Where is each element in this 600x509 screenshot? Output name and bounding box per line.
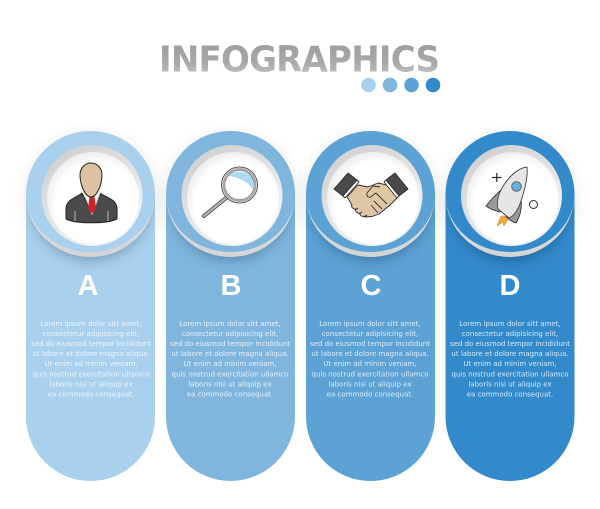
text block C: laboris nisi ut aliquip ex xyxy=(328,380,412,388)
panel: A xyxy=(25,131,157,481)
panel: C xyxy=(305,131,437,481)
icon: rocket xyxy=(486,167,538,226)
text block A xyxy=(31,320,151,398)
icon: handshake xyxy=(334,173,408,217)
text block B: consectetur adipisicing elit, xyxy=(182,330,278,338)
text block C: sed do eiusmod tempor incididunt xyxy=(310,340,430,348)
letter C: C xyxy=(361,270,382,302)
title dots xyxy=(361,78,440,92)
text block A: ut labore et dolore magna aliqua. xyxy=(32,350,150,358)
text block C: ea commodo consequat. xyxy=(327,390,413,398)
badge C xyxy=(306,131,435,257)
text block C: consectetur adipisicing elit, xyxy=(322,330,418,338)
text block A: consectetur adipisicing elit, xyxy=(43,330,139,338)
title: INFOGRAPHICS xyxy=(159,40,440,81)
text block C: Ut enim ad minim veniam, xyxy=(323,360,417,368)
column A xyxy=(26,193,155,481)
panel: B xyxy=(165,131,297,481)
text block B: sed do eiusmod tempor incididunt xyxy=(170,340,290,348)
text block A: sed do eiusmod tempor incididunt xyxy=(31,340,151,348)
text block D: ea commodo consequat. xyxy=(467,390,553,398)
text block D: consectetur adipisicing elit, xyxy=(462,330,558,338)
text block D: quis nostrud exercitation ullamco xyxy=(452,370,568,378)
icon: businessman xyxy=(66,163,117,223)
badge B xyxy=(166,131,295,257)
text block D: Lorem ipsum dolor sitt amet, xyxy=(459,320,561,328)
text block C xyxy=(310,320,430,398)
badge D xyxy=(446,131,574,257)
text block B: ut labore et dolore magna aliqua. xyxy=(171,350,289,358)
text block D: sed do eiusmod tempor incididunt xyxy=(450,340,570,348)
letter D: D xyxy=(500,270,520,302)
text block C: quis nostrud exercitation ullamco xyxy=(312,370,428,378)
text block C: ut labore et dolore magna aliqua. xyxy=(311,350,429,358)
panel: D xyxy=(444,131,576,481)
badge A xyxy=(26,131,155,257)
text block A: Lorem ipsum dolor sitt amet, xyxy=(40,320,142,328)
text block B: Ut enim ad minim veniam, xyxy=(183,360,277,368)
text block D: ut labore et dolore magna aliqua. xyxy=(451,350,569,358)
column D xyxy=(446,193,574,481)
text block D xyxy=(450,320,570,398)
icon: magnifying glass xyxy=(204,167,258,216)
column C xyxy=(306,193,435,481)
text block C: Lorem ipsum dolor sitt amet, xyxy=(319,320,421,328)
text block A: Ut enim ad minim veniam, xyxy=(44,360,138,368)
column B xyxy=(166,193,295,481)
text block B: laboris nisi ut aliquip ex xyxy=(188,380,272,388)
text block B: quis nostrud exercitation ullamco xyxy=(172,370,288,378)
text block A: laboris nisi ut aliquip ex xyxy=(49,380,133,388)
text block B: ea commodo consequat. xyxy=(187,390,273,398)
text block D: laboris nisi ut aliquip ex xyxy=(468,380,552,388)
text block A: ea commodo consequat. xyxy=(48,390,134,398)
letter B: B xyxy=(221,270,241,302)
text block D: Ut enim ad minim veniam, xyxy=(463,360,557,368)
text block B: Lorem ipsum dolor sitt amet, xyxy=(179,320,281,328)
letter A: A xyxy=(78,270,99,302)
text block B xyxy=(170,320,290,398)
text block A: quis nostrud exercitation ullamco xyxy=(33,370,149,378)
